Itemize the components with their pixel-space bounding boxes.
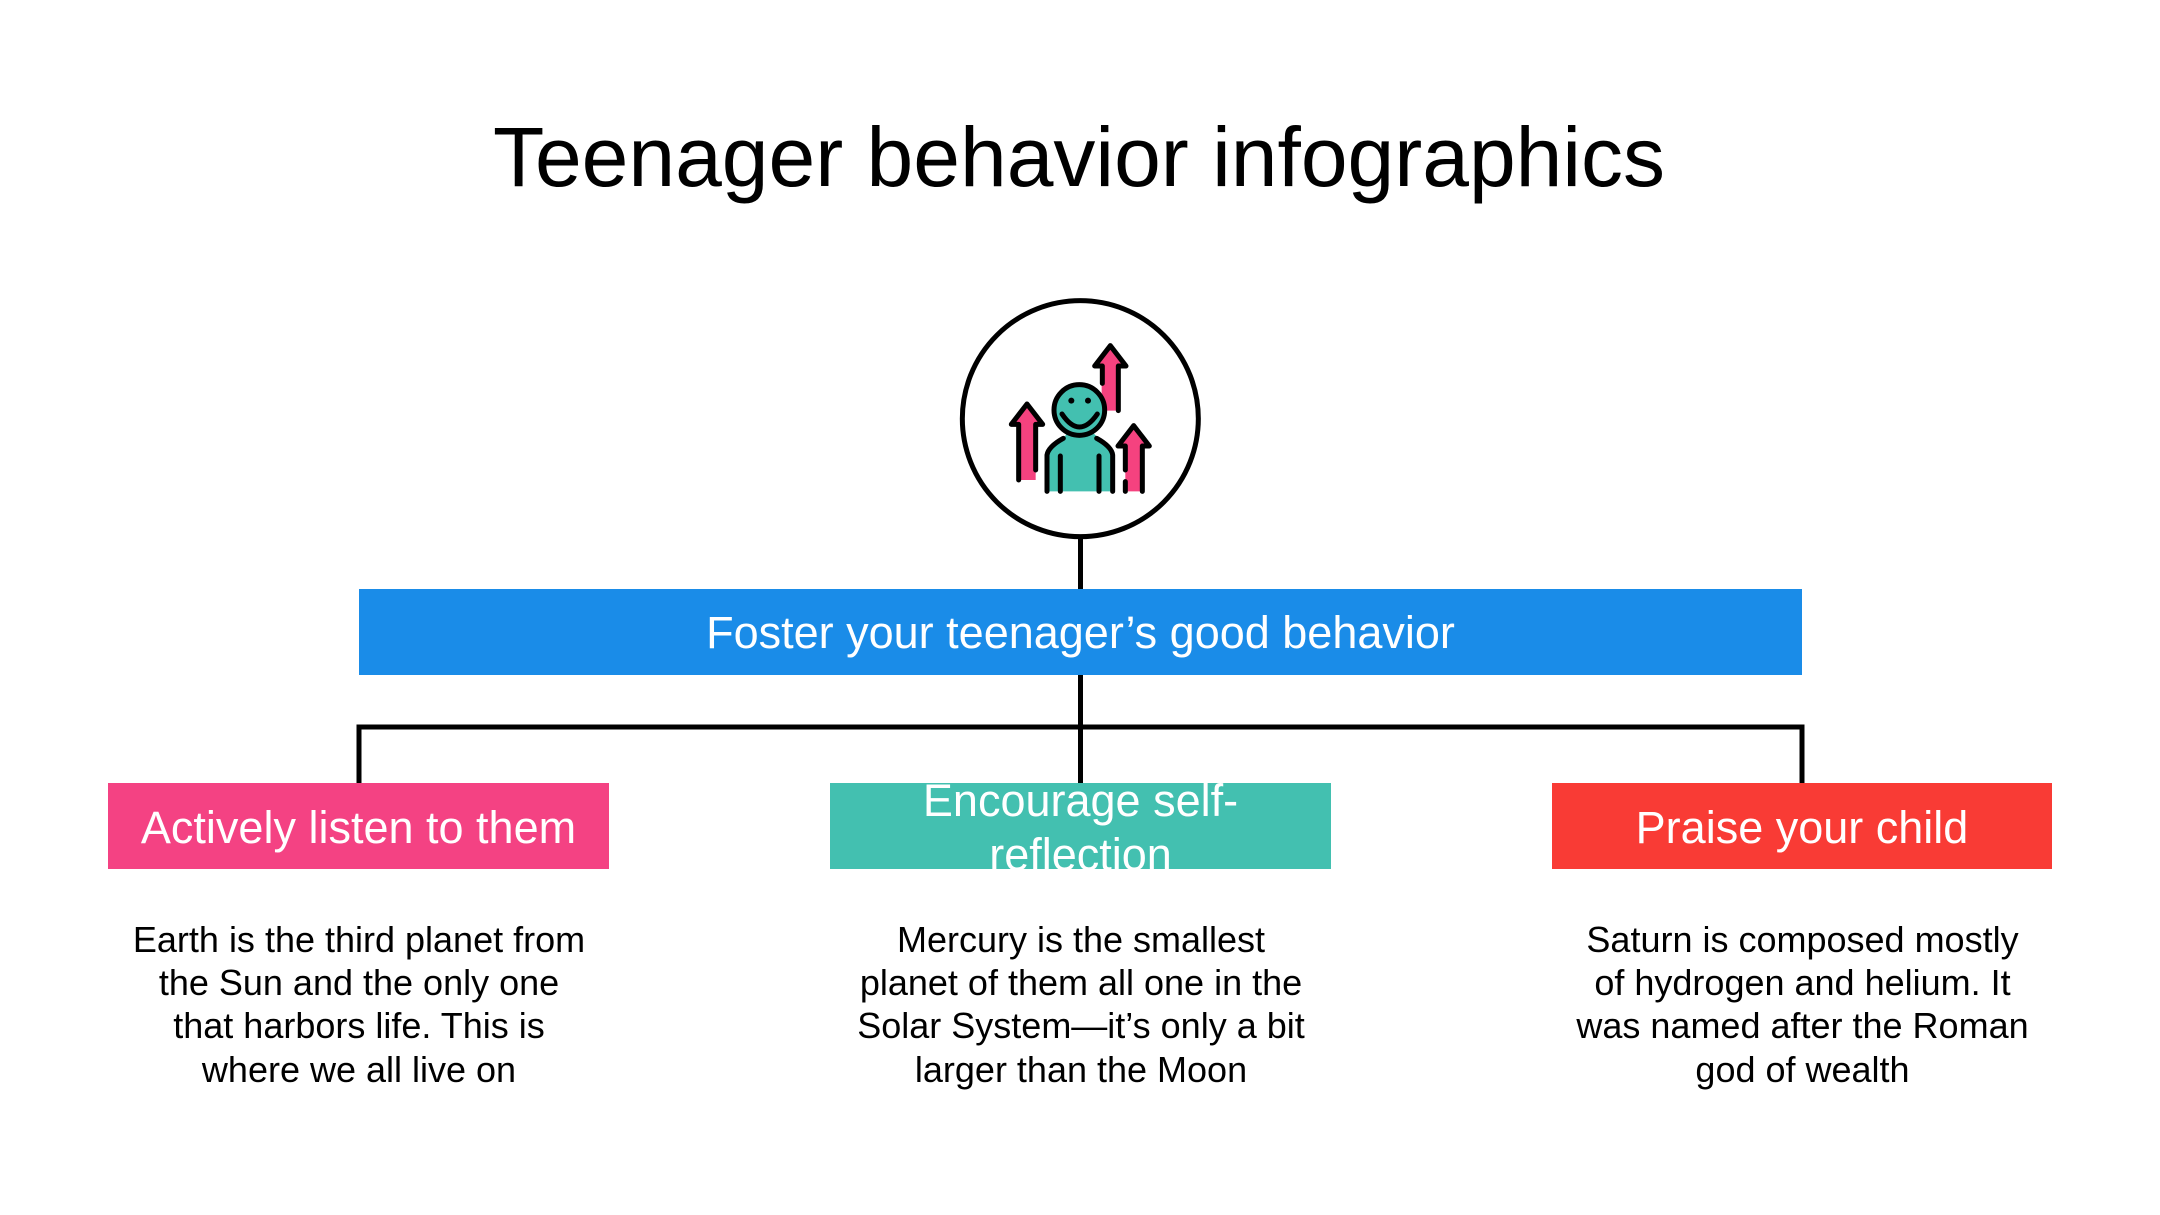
text: Mercury bbox=[857, 918, 1305, 1090]
text: Mercury: planet of them all one in the bbox=[860, 962, 1302, 1003]
text: Earth: Earth is the third planet from bbox=[133, 918, 585, 960]
title: Teenager behavior infographics bbox=[493, 110, 1665, 204]
text: Earth: where we all live on bbox=[202, 1049, 516, 1090]
text: Mercury: Solar System—it’s only a bit bbox=[857, 1005, 1305, 1046]
text: Earth: the Sun and the only one bbox=[159, 962, 559, 1003]
banner: main heading bbox=[359, 589, 1802, 675]
text: Mercury: larger than the Moon bbox=[915, 1049, 1247, 1090]
box: Praise your child bbox=[1552, 783, 2052, 869]
box: Actively listen to them: Actively listen to them bbox=[141, 802, 576, 853]
banner: main heading: Foster your teenager’s good behavior bbox=[706, 607, 1455, 658]
text: Saturn: god of wealth bbox=[1695, 1049, 1910, 1090]
text: Earth: that harbors life. This is bbox=[173, 1005, 545, 1046]
icon: circle with person and rising arrows bbox=[960, 298, 1201, 540]
text: Saturn: was named after the Roman bbox=[1576, 1005, 2029, 1046]
box: Actively listen to them bbox=[108, 783, 609, 869]
text: Saturn: of hydrogen and helium. It bbox=[1594, 962, 2011, 1003]
text: Saturn bbox=[1576, 918, 2029, 1090]
text: Earth bbox=[133, 918, 585, 1090]
box: Encourage self-reflection bbox=[830, 783, 1331, 869]
text: Saturn: Saturn is composed mostly bbox=[1586, 918, 2019, 960]
text: Mercury: Mercury is the smallest bbox=[897, 918, 1265, 960]
box: Praise your child: Praise your child bbox=[1636, 802, 1968, 853]
